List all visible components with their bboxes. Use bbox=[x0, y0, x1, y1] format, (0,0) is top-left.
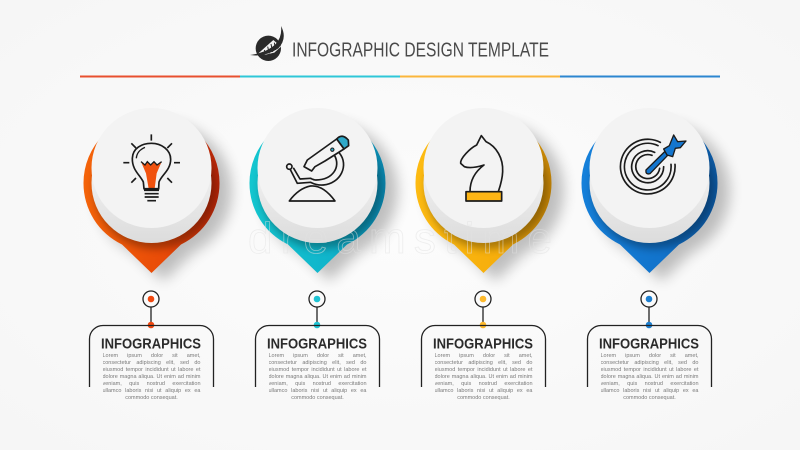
text box bbox=[588, 326, 712, 387]
panel: step 1 bbox=[83, 108, 232, 404]
body text: Lorem ipsum dolor sit amet, bbox=[434, 352, 532, 358]
panel: step 4 bbox=[581, 108, 730, 404]
text box bbox=[422, 326, 546, 387]
icon: target with arrow bbox=[620, 135, 686, 194]
body text: ullamco laboris nisi ut aliquip ex ea bbox=[268, 388, 366, 394]
icon: microscope bbox=[287, 136, 349, 201]
pin: cyan bbox=[249, 108, 398, 281]
body text bbox=[600, 352, 700, 404]
body text: commodo consequat. bbox=[623, 395, 676, 401]
heading: INFOGRAPHICS bbox=[433, 336, 533, 352]
watermark: dreamstime bbox=[248, 214, 552, 263]
body text: veniam, quis nostrud exercitation bbox=[600, 381, 698, 387]
title: INFOGRAPHIC DESIGN TEMPLATE bbox=[292, 40, 549, 62]
text box bbox=[256, 326, 380, 387]
body text: veniam, quis nostrud exercitation bbox=[434, 381, 532, 387]
body text: Lorem ipsum dolor sit amet, bbox=[268, 352, 366, 358]
body text: dolore magna aliqua. Ut enim ad minim bbox=[600, 374, 698, 380]
body text bbox=[268, 352, 368, 404]
body text: veniam, quis nostrud exercitation bbox=[268, 381, 366, 387]
infographic canvas bbox=[80, 26, 738, 400]
pin: blue bbox=[581, 108, 730, 281]
body text: ullamco laboris nisi ut aliquip ex ea bbox=[102, 388, 200, 394]
body text: dolore magna aliqua. Ut enim ad minim bbox=[102, 374, 200, 380]
body text: eiusmod tempor incididunt ut labore et bbox=[268, 367, 366, 373]
panel: step 2 bbox=[249, 108, 398, 404]
body text: consectetur adipiscing elit, sed do bbox=[268, 360, 366, 366]
body text: consectetur adipiscing elit, sed do bbox=[434, 360, 532, 366]
header rule bbox=[80, 76, 720, 78]
body text: ullamco laboris nisi ut aliquip ex ea bbox=[600, 388, 698, 394]
body text: commodo consequat. bbox=[125, 395, 178, 401]
body text: dolore magna aliqua. Ut enim ad minim bbox=[434, 374, 532, 380]
connector bbox=[143, 291, 159, 328]
icon: chess knight bbox=[461, 136, 503, 201]
heading: INFOGRAPHICS bbox=[599, 336, 699, 352]
body text: consectetur adipiscing elit, sed do bbox=[600, 360, 698, 366]
body text: eiusmod tempor incididunt ut labore et bbox=[434, 367, 532, 373]
pin: red bbox=[83, 108, 232, 281]
connector bbox=[309, 291, 325, 328]
connector bbox=[475, 291, 491, 328]
body text bbox=[434, 352, 534, 404]
body text: commodo consequat. bbox=[457, 395, 510, 401]
logo icon bbox=[250, 26, 284, 61]
body text: Lorem ipsum dolor sit amet, bbox=[600, 352, 698, 358]
connector bbox=[641, 291, 657, 328]
body text: eiusmod tempor incididunt ut labore et bbox=[600, 367, 698, 373]
pin: yellow bbox=[415, 108, 564, 281]
body text: ullamco laboris nisi ut aliquip ex ea bbox=[434, 388, 532, 394]
body text: eiusmod tempor incididunt ut labore et bbox=[102, 367, 200, 373]
body text: commodo consequat. bbox=[291, 395, 344, 401]
icon: light bulb bbox=[123, 134, 180, 201]
panel: step 3 bbox=[415, 108, 564, 404]
body text: veniam, quis nostrud exercitation bbox=[102, 381, 200, 387]
body text bbox=[102, 352, 202, 404]
heading: INFOGRAPHICS bbox=[267, 336, 367, 352]
text box bbox=[90, 326, 214, 387]
body text: consectetur adipiscing elit, sed do bbox=[102, 360, 200, 366]
heading: INFOGRAPHICS bbox=[101, 336, 201, 352]
body text: dolore magna aliqua. Ut enim ad minim bbox=[268, 374, 366, 380]
body text: Lorem ipsum dolor sit amet, bbox=[102, 352, 200, 358]
